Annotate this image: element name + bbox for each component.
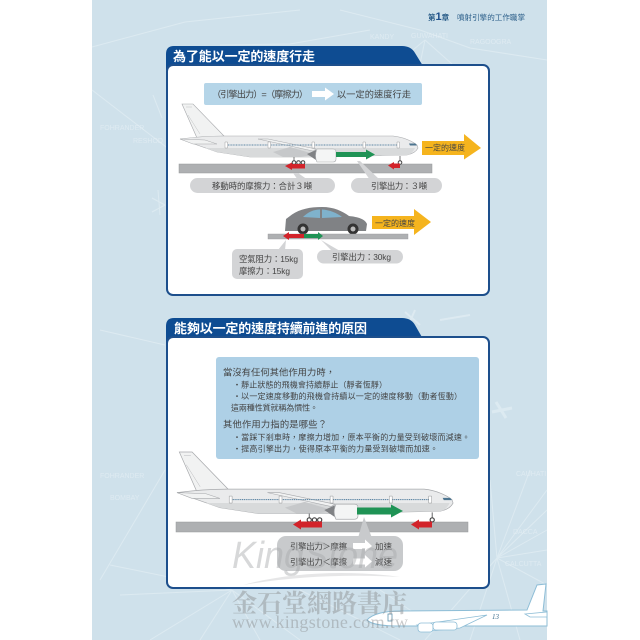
watermark: www.kingstone.com.tw [232,612,408,632]
panel 1 heading: 為了能以一定的速度行走 [173,49,315,64]
panel: constant speed [166,46,489,295]
text: GUWAHATI [411,33,448,40]
friction bubble: 移動時的摩擦力：合計３噸 [212,181,313,191]
bubble pointers [293,161,380,180]
formula box: 以一定的速度行走 [337,88,411,100]
friction arrows [285,162,400,170]
resistance bubble: 空氣阻力：15kg [239,254,298,264]
chapter header: 噴射引擎的工作職掌 [457,12,526,22]
explanation box: 其他作用力指的是哪些？ [223,418,327,430]
comparison bubble [277,536,403,571]
friction arrows [293,520,432,530]
page number: 13 [492,613,500,621]
car force arrows [283,232,323,240]
page background [92,0,547,640]
chapter header: 第1章 [428,11,450,23]
panel 1 tab [166,46,423,70]
car speed arrow [372,209,431,235]
explanation box [216,357,479,459]
text: RAGOOGRA [470,39,512,46]
speed arrow [422,134,481,160]
watermark [232,535,408,632]
thrust arrow [336,150,375,160]
text: KANDY [370,34,394,41]
panel 2 heading: 能夠以一定的速度持續前進的原因 [174,321,367,336]
comparison bubble: 引擎出力＞摩擦 [290,542,348,552]
panel 2 tab [166,318,423,343]
formula box: （引擎出力）=（摩擦力） [212,88,308,100]
car thrust bubble: 引擎出力：30kg [332,252,391,262]
panel 2 body [167,337,489,588]
thrust bubble [351,178,442,193]
explanation box: 這兩種性質就稱為慣性。 [231,402,318,412]
watermark: KingStone [232,535,398,577]
text: CAUHATI [516,471,546,478]
text: BOMBAY [110,495,140,502]
text: CALCUTTA [505,561,542,568]
comparison bubble: 加速 [375,542,393,552]
bubble pointer [358,517,372,538]
text: FOHRANDER [100,125,144,132]
explanation box: 當沒有任何其他作用力時， [223,366,335,378]
airplane [180,104,418,164]
airplane [177,452,453,522]
car speed arrow: 一定的速度 [375,218,415,228]
text: FOHRANDER [100,473,144,480]
thrust bubble: 引擎出力：３噸 [371,181,428,191]
explanation box: ・當踩下剎車時，摩擦力增加，原本平衡的力量受到破壞而減速。 [233,432,470,442]
thrust arrow [357,504,403,518]
speed arrow: 一定的速度 [425,142,465,152]
panel 1 body [167,65,489,295]
explanation box: ・提高引擎出力，使得原本平衡的力量受到破壞而加速。 [233,444,438,454]
car road [268,234,408,239]
comparison bubble: 引擎出力＜摩擦 [290,557,348,567]
watermark: 金石堂網路書店 [232,590,407,618]
page corner airplane [367,584,547,632]
friction bubble [190,178,335,193]
explanation box: ・以一定速度移動的飛機會持續以一定的速度移動（動者恆動） [233,391,462,401]
chapter header [428,11,526,23]
comparison bubble: 減速 [375,557,393,567]
text: DACCA [513,529,538,536]
resistance bubble [232,249,303,279]
route map pattern [92,10,547,640]
resistance bubble: 摩擦力：15kg [239,266,290,276]
car [285,207,367,234]
runway [176,522,468,532]
bubble pointers [278,240,340,251]
formula box [204,83,422,105]
car thrust bubble [317,250,403,264]
text: RESHOD [133,138,163,145]
panel: why speed is sustained [166,318,489,588]
explanation box: ・靜止狀態的飛機會持續靜止（靜者恆靜） [233,380,387,390]
runway [179,164,432,173]
